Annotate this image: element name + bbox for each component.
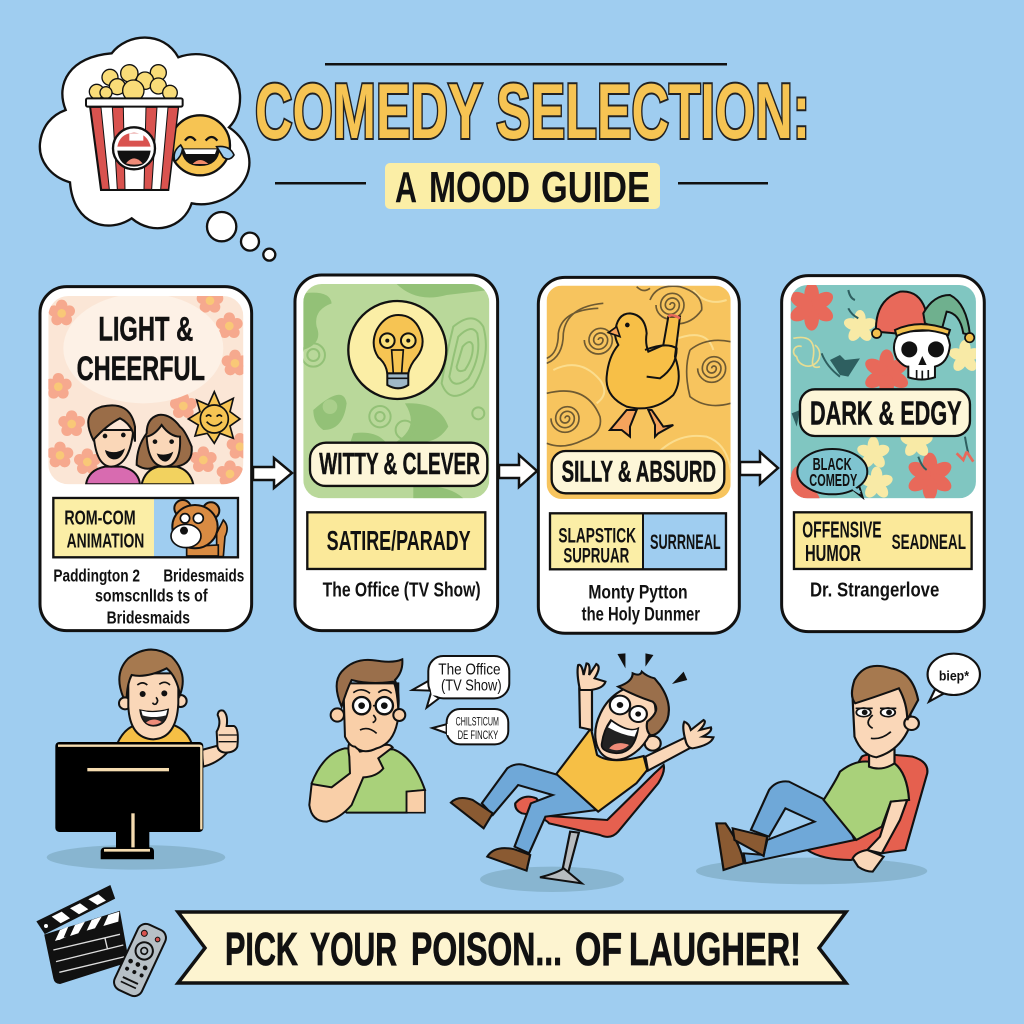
card art: flowers, people and sun xyxy=(48,296,244,484)
genre box: SURRNEAL xyxy=(650,530,721,554)
character: laughing viewer in chair xyxy=(451,653,713,892)
popcorn xyxy=(89,65,177,101)
heading xyxy=(310,443,487,486)
banner: YOUR xyxy=(310,923,397,975)
genre box xyxy=(550,513,726,569)
speech bubble: small caption: DE FINCKY xyxy=(458,728,498,742)
arrow xyxy=(740,452,778,484)
icon: jester skull xyxy=(872,292,974,379)
banner xyxy=(178,912,846,983)
heading xyxy=(800,389,970,436)
panel: light and cheerful xyxy=(40,287,253,631)
character: happy viewer with tv xyxy=(47,650,238,870)
heading: LIGHT & xyxy=(98,311,193,349)
heading: CHEERFUL xyxy=(77,350,205,388)
character: relaxed viewer in chair xyxy=(696,654,980,884)
film titles: Monty Pytton xyxy=(588,582,688,603)
genre box: OFFENSIVE xyxy=(802,516,882,542)
film titles: the Holy Dunmer xyxy=(582,605,700,626)
icon: smiling sun xyxy=(188,392,240,443)
panel: silly and absurd xyxy=(538,277,739,633)
heading xyxy=(552,451,724,493)
speech bubble: the office xyxy=(412,656,509,708)
film titles xyxy=(53,566,244,627)
speech bubble: black comedy: BLACK xyxy=(813,454,852,474)
banner: PICK xyxy=(225,923,298,975)
genre box xyxy=(53,498,238,557)
genre box xyxy=(307,512,485,569)
panel: dark and edgy xyxy=(774,276,984,632)
heading: WITTY & CLEVER xyxy=(319,447,480,481)
popcorn bucket xyxy=(86,98,183,190)
icon: thought cloud with popcorn and laughing emoji xyxy=(40,38,275,261)
film title: The Office (TV Show) xyxy=(323,579,481,602)
subtitle: MOOD xyxy=(429,163,530,212)
speech bubble: small caption xyxy=(432,709,508,744)
film titles: Paddington 2 xyxy=(53,566,140,586)
genre box: HUMOR xyxy=(805,540,861,566)
icon: light bulb with glasses xyxy=(348,301,446,399)
genre box: SATIRE/PARADY xyxy=(327,525,471,556)
arrow xyxy=(499,455,537,487)
laughing emoji xyxy=(170,115,234,175)
subtitle xyxy=(275,163,768,212)
card art: orange swirls xyxy=(547,286,731,499)
person one xyxy=(86,405,140,484)
genre box xyxy=(794,512,972,569)
speech bubble: small caption: CHILSTICUM xyxy=(456,715,499,729)
excitement marks xyxy=(617,653,687,684)
arrow xyxy=(253,458,292,488)
speech bubble: beep: biep* xyxy=(939,669,969,684)
subtitle: A xyxy=(395,163,417,212)
speech bubble: the office: The Office xyxy=(438,661,501,678)
banner: OF xyxy=(575,923,622,975)
icon: bear xyxy=(171,500,227,557)
film title: Dr. Strangerlove xyxy=(810,579,939,602)
panel: witty and clever xyxy=(295,275,498,631)
icon: duck xyxy=(607,313,680,437)
banner: POISON... xyxy=(411,923,562,975)
genre box: ANIMATION xyxy=(67,529,144,552)
card art: teal floral pattern xyxy=(790,285,976,498)
speech bubble: the office: (TV Show) xyxy=(441,678,502,695)
genre box: ROM-COM xyxy=(64,506,136,529)
thought bubbles xyxy=(207,212,275,261)
character: thinking viewer xyxy=(309,656,509,822)
television xyxy=(55,742,203,859)
film titles: somscnlIds ts of xyxy=(95,586,208,606)
speech bubble: black comedy: COMEDY xyxy=(809,470,857,490)
banner: LAUGHER! xyxy=(629,923,801,975)
speech bubble: black comedy xyxy=(797,449,867,497)
clapperboard xyxy=(37,886,128,983)
heading xyxy=(77,311,205,388)
heading: SILLY & ABSURD xyxy=(562,456,716,489)
thought cloud xyxy=(40,38,249,228)
film titles: Bridesmaids xyxy=(163,566,244,586)
film titles: Bridesmaids xyxy=(107,607,190,627)
speech bubble: beep xyxy=(928,654,980,702)
film titles xyxy=(582,582,700,626)
genre box: SLAPSTICK xyxy=(558,523,636,547)
card art: green swirls xyxy=(302,284,489,498)
genre box: SEADNEAL xyxy=(892,530,966,554)
genre box: SUPRUAR xyxy=(563,544,629,568)
icon: clapperboard and remote xyxy=(37,886,169,999)
subtitle: GUIDE xyxy=(541,163,650,212)
person two xyxy=(137,415,193,484)
remote control xyxy=(111,921,169,999)
